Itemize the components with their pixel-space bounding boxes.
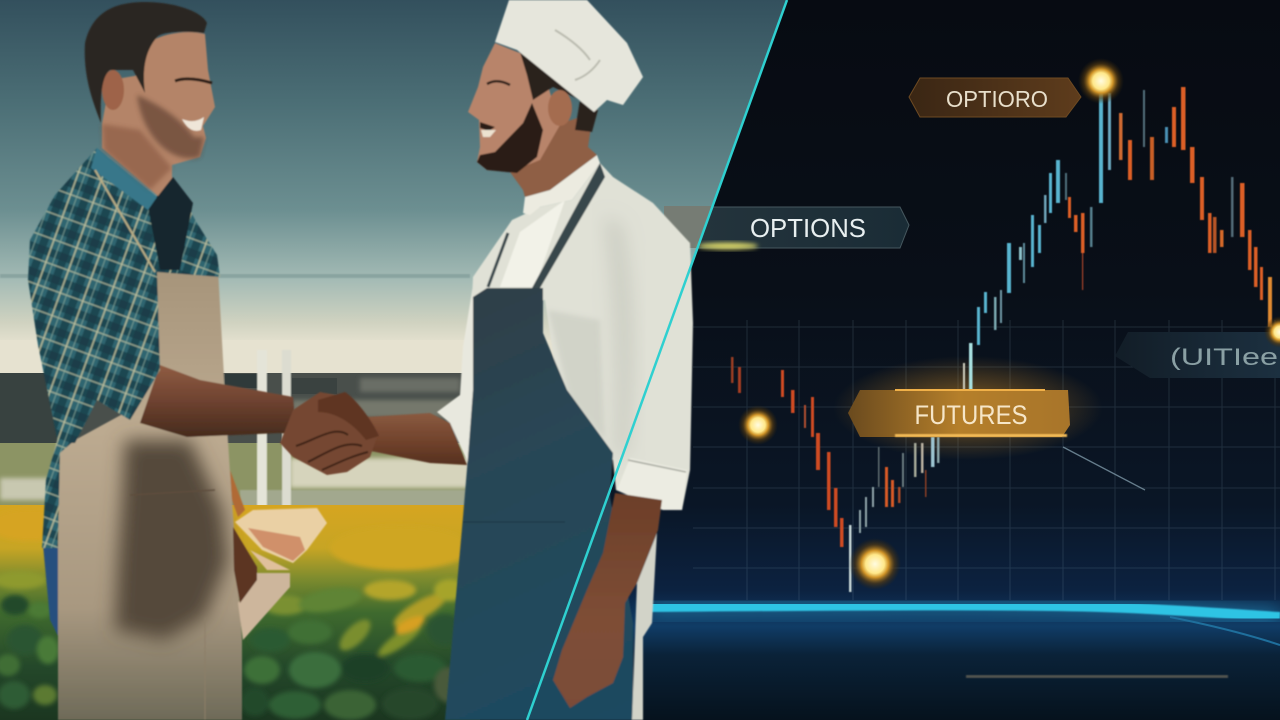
label: OPTIONS: [664, 206, 909, 250]
bread: [235, 508, 327, 563]
apron shadow: [115, 440, 228, 640]
figure: chef: [366, 0, 693, 720]
apron: [58, 270, 242, 720]
hair: [520, 52, 598, 132]
collar: [523, 155, 600, 215]
forearm and hand: [553, 493, 662, 708]
chest shadow: [548, 310, 605, 440]
moustache: [480, 122, 495, 131]
recovery candles: [849, 343, 972, 592]
label: partial tag at right edge: [1115, 332, 1280, 378]
glow marker: left: [738, 405, 778, 445]
falling candles, upper: [1068, 87, 1272, 327]
shirt torso and sleeve: [472, 163, 693, 510]
beard: [477, 103, 543, 173]
cloth at waist: [632, 533, 657, 720]
apron strap: [532, 163, 605, 288]
handshake: [280, 392, 379, 475]
label: FUTURES: FUTURES: [914, 400, 1028, 430]
panel: farm background: [0, 0, 800, 720]
left sleeve: [437, 285, 488, 463]
amber glow behind futures tag: [833, 356, 1103, 460]
collar: [91, 148, 157, 210]
thin strap: [488, 233, 508, 287]
glow marker: right edge: [1264, 316, 1280, 348]
rising candles: [977, 90, 1234, 345]
neck shadow: [102, 124, 172, 190]
crop leaves: [0, 509, 470, 720]
ear: [102, 70, 124, 110]
diagonal divider line: [527, 0, 787, 720]
label: OPTIORO: [909, 78, 1081, 117]
face: [468, 43, 560, 172]
apron: [445, 288, 633, 720]
hair: [85, 2, 207, 123]
shirt: [28, 148, 220, 443]
candlestick chart: [731, 87, 1272, 592]
forearm: [140, 365, 296, 437]
glow marker: trough: [849, 538, 901, 590]
eye: [487, 81, 510, 85]
jeans: [43, 545, 60, 640]
stubble: [137, 95, 204, 158]
figure: farmer: [28, 2, 327, 720]
teeth: [182, 117, 204, 131]
chart grid: [693, 320, 1280, 600]
shirt highlight: [500, 200, 565, 287]
falling candles, lower: [731, 357, 926, 547]
label: OPTIORO: OPTIORO: [946, 86, 1048, 112]
neck: [510, 113, 597, 197]
label: FUTURES: [848, 389, 1070, 437]
faint lower streak: [966, 675, 1228, 678]
neck and face: [102, 32, 215, 196]
panel: dark market background: [527, 0, 1280, 720]
rolled cuff: [617, 458, 687, 510]
trend line annotation: [1063, 447, 1145, 490]
label: partial tag at right edge: (UITIee: [1170, 344, 1278, 371]
forearm to handshake: [366, 413, 467, 465]
hand under bread: [233, 527, 257, 603]
orange strap: [230, 470, 245, 517]
eye: [175, 79, 212, 83]
glow marker: peak: [1078, 58, 1124, 104]
label: OPTIONS: OPTIONS: [750, 213, 866, 243]
teeth: [481, 130, 496, 137]
glowing horizon beam: [648, 605, 1280, 645]
sleeve shadow: [604, 215, 633, 455]
apron pocket: [463, 521, 565, 523]
shirt tail: [42, 430, 75, 548]
rolled sleeve: [97, 340, 160, 420]
ear: [548, 90, 572, 126]
inner dark shirt: [148, 177, 193, 270]
toque hat: [495, 0, 643, 112]
cloth: [238, 573, 290, 640]
